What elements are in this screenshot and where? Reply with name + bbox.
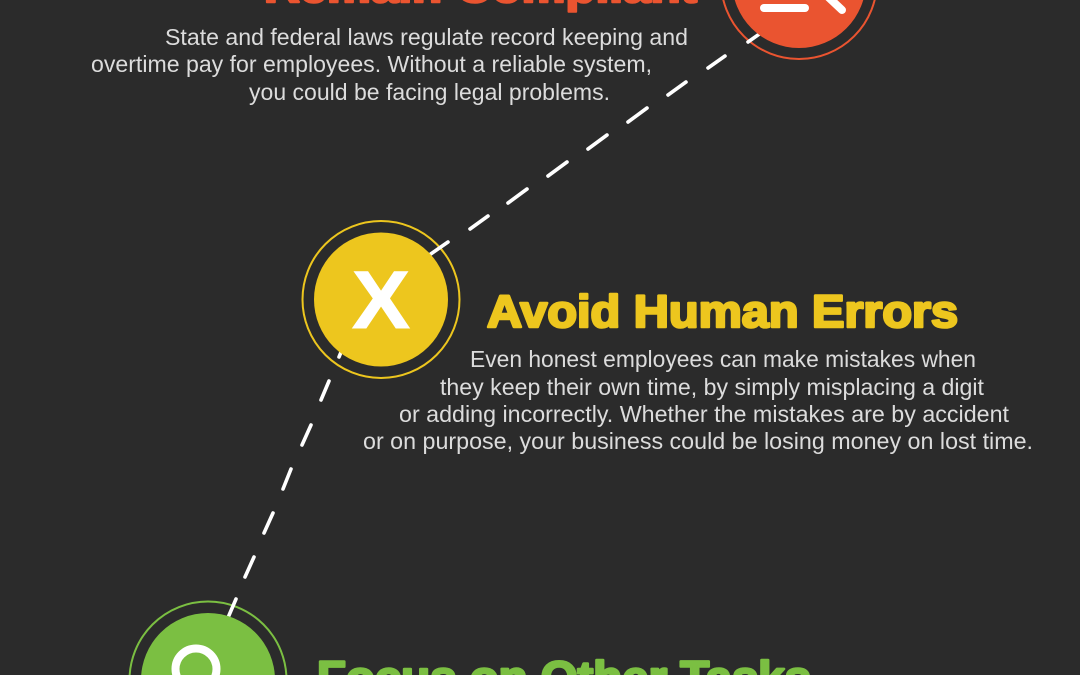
text block: avoid human errors: [363, 346, 1033, 454]
icon: red circle with checklist: [732, 0, 866, 48]
dashed connector: red to yellow: [425, 30, 765, 258]
icon: yellow circle with X: X: [352, 255, 410, 346]
text block: remain compliant: you could be facing legal problems.: [249, 79, 610, 105]
icon: yellow circle with X: [314, 232, 448, 366]
text block: remain compliant: overtime pay for employees. Without a reliable system,: [91, 51, 652, 77]
panel: avoid human errors: [314, 232, 1033, 454]
text block: avoid human errors: or adding incorrectly. Whether the mistakes are by accident: [399, 401, 1010, 427]
heading: avoid human errors: Avoid Human Errors: [487, 286, 958, 337]
text block: avoid human errors: they keep their own time, by simply misplacing a digit: [440, 374, 985, 400]
icon rings: [130, 0, 877, 675]
text block: avoid human errors: or on purpose, your business could be losing money on lost time.: [363, 428, 1033, 454]
panel: focus on other tasks: [141, 613, 811, 675]
dashed connector: yellow to green: [227, 345, 344, 620]
text block: avoid human errors: Even honest employees can make mistakes when: [470, 346, 976, 372]
text block: remain compliant: [91, 24, 688, 105]
text block: remain compliant: State and federal laws regulate record keeping and: [165, 24, 688, 50]
icon: green circle with white ring: [141, 613, 275, 675]
panel: remain compliant: [91, 0, 866, 105]
